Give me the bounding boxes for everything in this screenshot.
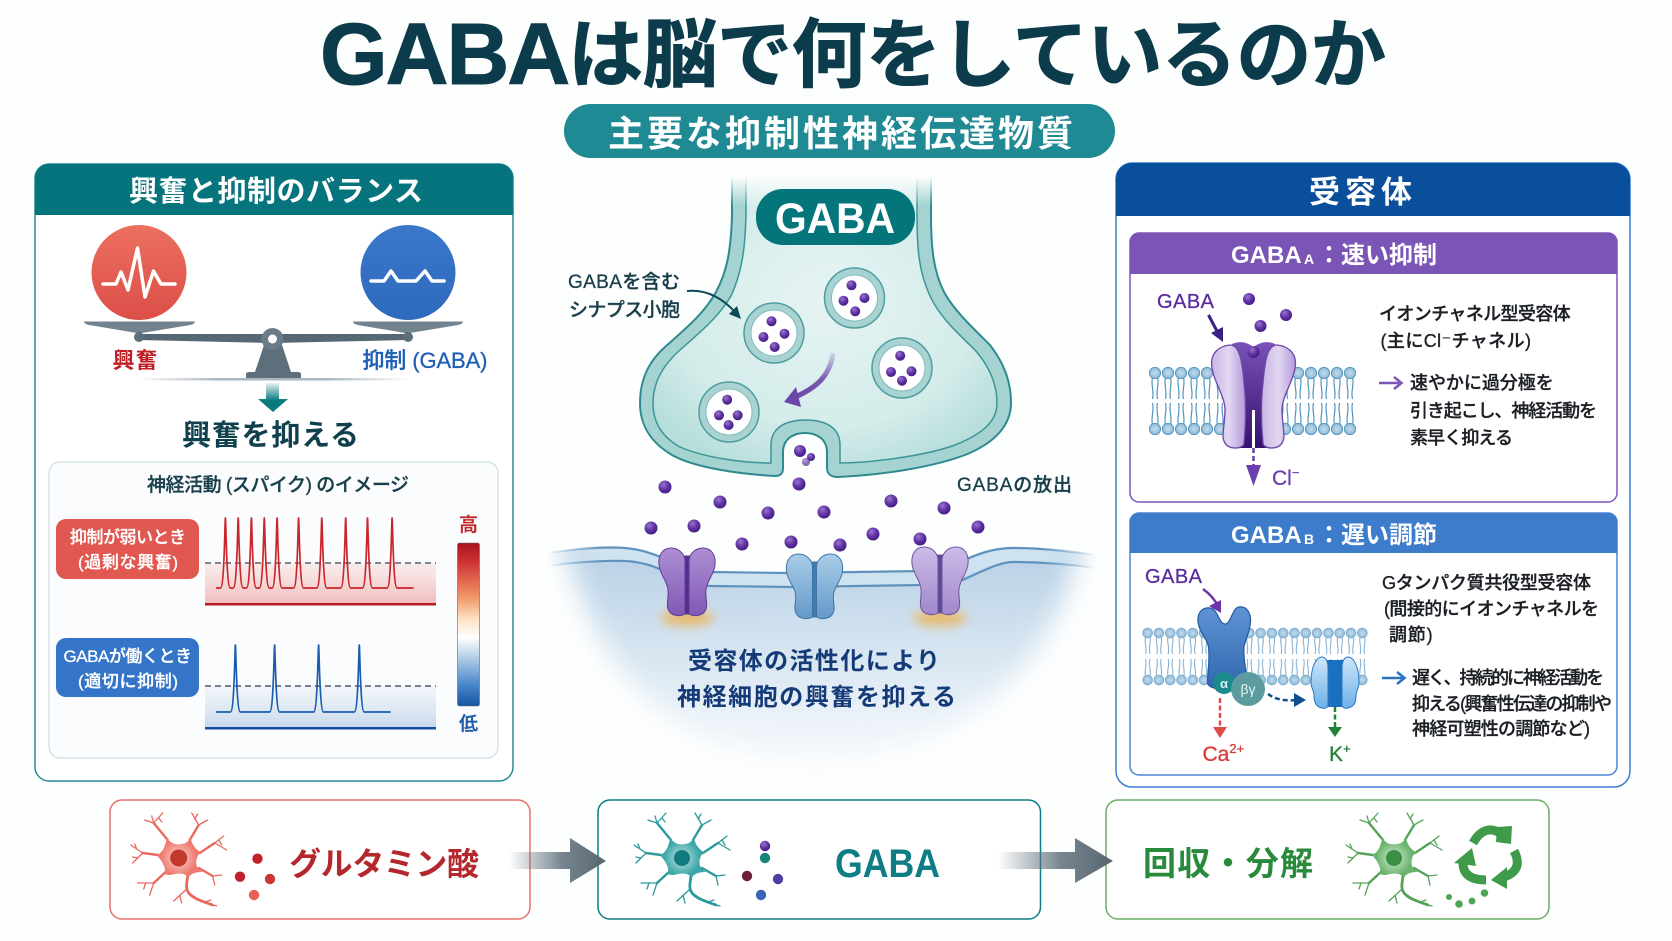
diagram: ion channel [1148, 293, 1356, 448]
label: GABA working: GABAが働くとき [64, 646, 192, 666]
arrow: G-protein to channel [1268, 693, 1306, 707]
text: GABA-A description: 引き起こし、神経活動を [1410, 401, 1597, 421]
card: GABA-A [1130, 233, 1617, 502]
arrow: potassium [1328, 707, 1342, 737]
label: chloride: Cl [1272, 467, 1292, 490]
legend: color bar [458, 514, 480, 735]
icon: green neuron [1346, 813, 1442, 906]
text: GABA-B description: 調節) [1389, 625, 1433, 645]
text: GABA-B description: Gタンパク質共役型受容体 [1382, 573, 1591, 593]
box: glutamate [110, 800, 530, 919]
text: GABA-B description: (間接的にイオンチャネルを [1384, 599, 1599, 619]
label: potassium: K [1329, 743, 1343, 766]
arrow: down [258, 383, 288, 412]
label: glutamate: グルタミン酸 [289, 846, 479, 882]
label: weak inhibition: (過剰な興奮) [78, 553, 178, 572]
label: GABA: GABA [1145, 566, 1203, 588]
arrow: GABA-A result [1379, 377, 1402, 389]
text: GABA-B description: 抑える(興奮性伝達の抑制や [1412, 694, 1612, 714]
label: excitation: 興奮 [112, 348, 158, 373]
diagram: G-protein receptor: α [1220, 676, 1228, 691]
panel: receptors [1116, 163, 1630, 787]
arrow: GABA to reuptake [998, 838, 1113, 883]
label: potassium: + [1343, 741, 1351, 756]
card: spike image [49, 462, 498, 758]
diagram: G-protein receptor [1142, 607, 1368, 708]
card header: ：遅い調節 [1317, 522, 1437, 549]
title: GABA [320, 6, 568, 103]
label: vesicles: GABAを含む [568, 271, 680, 293]
diagram: synapse [547, 160, 1096, 762]
panel header [35, 164, 513, 215]
vesicle 2 [824, 268, 884, 328]
icon: red transmitter dots [235, 854, 275, 900]
postsynaptic neuron [547, 538, 1096, 762]
label: reuptake and breakdown: 回収・分解 [1143, 845, 1313, 882]
label: vesicles [568, 271, 680, 321]
card header: A [1304, 251, 1314, 267]
icon: recycle [1454, 826, 1517, 889]
icon: teal neuron [634, 813, 730, 906]
card header: GABA [1231, 242, 1302, 269]
text: GABA-B description [1382, 573, 1612, 739]
label: GABA working [56, 638, 199, 697]
panel header: 興奮と抑制のバランス [129, 175, 423, 208]
arrow: vesicle movement [784, 353, 833, 407]
text: GABA-A description: 素早く抑える [1410, 428, 1513, 448]
arrow: label to vesicle [687, 291, 741, 319]
card header: ：速い抑制 [1317, 242, 1437, 269]
text: receptor activation: 受容体の活性化により [688, 648, 940, 675]
icon: recycling dots [1446, 889, 1488, 908]
text: GABA-B description: 遅く、持続的に神経活動を [1412, 668, 1604, 688]
card: GABA-B [1130, 513, 1617, 775]
card header: B [1304, 531, 1314, 547]
GABA pill: GABA [775, 195, 895, 243]
text: receptor activation [677, 648, 956, 711]
label: calcium: Ca [1202, 743, 1229, 766]
title: は脳で何をしているのか [568, 13, 1385, 97]
card header [1130, 233, 1617, 274]
label: GABA: GABA [1157, 291, 1215, 313]
GABA pill [756, 189, 915, 245]
card header [1130, 513, 1617, 553]
receptor: blue [786, 554, 843, 619]
chart: excessive spikes [205, 518, 436, 606]
icon: mixed transmitter dots [742, 841, 783, 900]
card title: 神経活動 (スパイク) のイメージ [147, 474, 409, 496]
text: suppress excitation: 興奮を抑える [182, 419, 359, 452]
arrow: calcium [1213, 698, 1227, 738]
chart: regulated spikes [205, 645, 436, 730]
text: GABA-A description [1379, 304, 1597, 448]
legend: color bar: 高 [459, 514, 478, 536]
card header: GABA [1231, 522, 1302, 549]
subtitle pill [564, 104, 1115, 158]
arrow: chloride flow [1246, 448, 1261, 486]
text: receptor activation: 神経細胞の興奮を抑える [677, 684, 956, 711]
panel header: 受容体 [1309, 175, 1412, 210]
icon: balance scale [84, 322, 463, 380]
label: calcium: 2+ [1229, 741, 1244, 756]
text: GABA-B description: 神経可塑性の調節など) [1412, 719, 1590, 739]
text: GABA-A description: イオンチャネル型受容体 [1379, 304, 1571, 324]
arrow: GABA to channel [1208, 315, 1223, 342]
vesicle 4 [699, 382, 759, 442]
icon: excitation circle [92, 225, 186, 320]
receptor: lilac [912, 547, 968, 615]
released GABA in cleft [644, 445, 984, 552]
vesicle 1 [744, 303, 804, 363]
icon: inhibition circle [360, 225, 456, 320]
icon: red neuron [131, 813, 227, 906]
subtitle pill: 主要な抑制性神経伝達物質 [608, 113, 1073, 154]
label: inhibition GABA: 抑制 (GABA) [362, 348, 488, 373]
arrow: GABA-B result [1382, 672, 1404, 684]
label: vesicles: シナプス小胞 [569, 299, 680, 321]
box: reuptake and breakdown [1106, 800, 1549, 919]
text: GABA-A description: 速やかに過分極を [1410, 373, 1554, 393]
arrow: GABA to receptor [1203, 589, 1221, 613]
label: GABA working: (適切に抑制) [78, 672, 178, 691]
label: chloride: − [1292, 465, 1299, 480]
label: weak inhibition [56, 519, 199, 579]
legend: color bar: 低 [459, 713, 478, 735]
panel: excitation and inhibition balance [35, 164, 513, 781]
box: GABA [598, 800, 1040, 919]
vesicle 3 [872, 338, 932, 398]
presynaptic terminal [640, 160, 1011, 477]
label: weak inhibition: 抑制が弱いとき [70, 527, 186, 547]
receptor: purple [659, 548, 715, 616]
panel header [1116, 163, 1630, 216]
diagram: G-protein receptor: βγ [1240, 681, 1256, 697]
label: GABA release: GABAの放出 [957, 474, 1072, 496]
label: GABA: GABA [835, 842, 940, 886]
arrow: glutamate to GABA [509, 838, 606, 883]
text: GABA-A description: (主にCl⁻チャネル) [1380, 331, 1531, 351]
